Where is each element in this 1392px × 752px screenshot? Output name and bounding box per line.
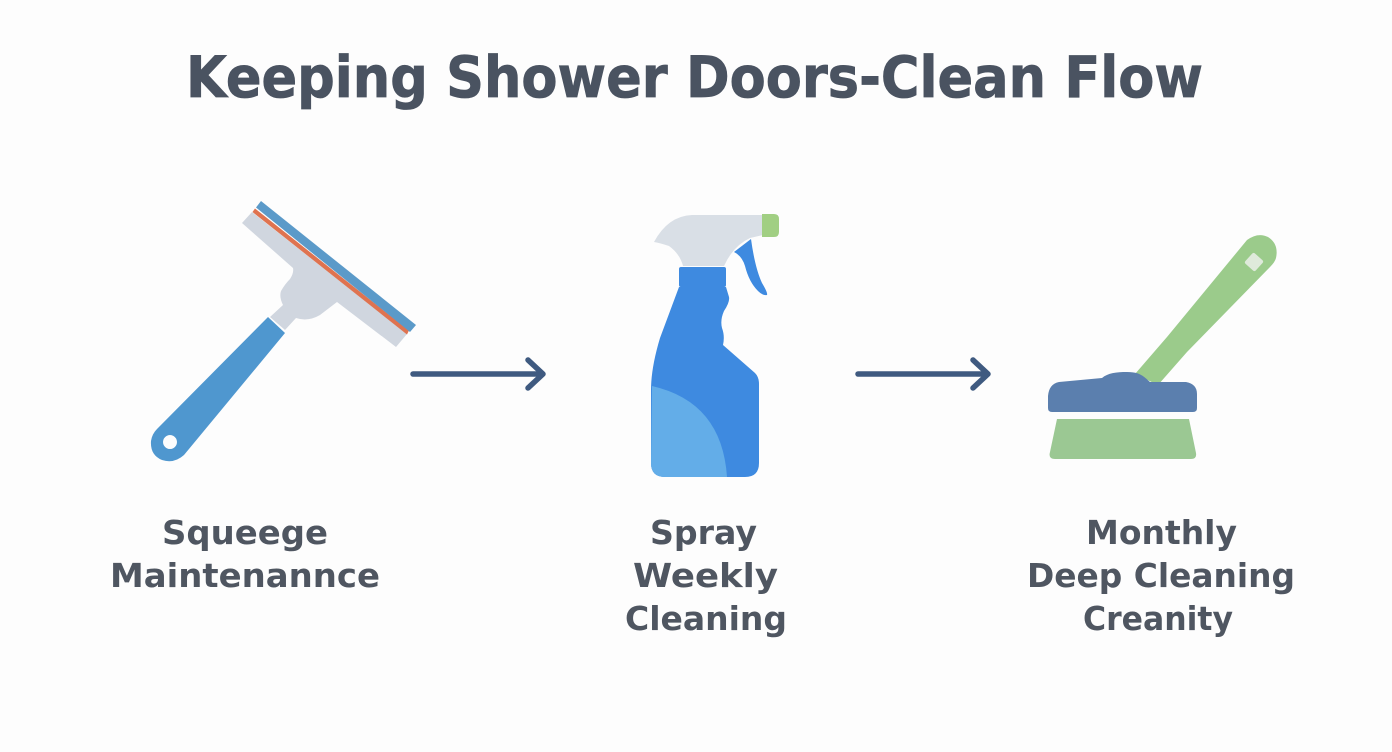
brush head [1048,372,1197,412]
bottle body [651,287,759,477]
squeegee handle [151,317,285,461]
label: squeegee maintenance [110,513,380,595]
bottle collar [679,267,726,287]
title: Keeping Shower Doors-Clean Flow [186,45,1203,111]
label: monthly deep cleaning [1027,513,1295,638]
handle grip mark [1244,252,1264,272]
sprayer head [654,215,763,266]
bottle highlight [651,386,727,477]
icon: scrub brush [1048,235,1277,459]
icon: spray bottle [651,214,779,477]
label: squeegee maintenance: Maintenannce [110,556,380,595]
icon: squeegee [151,201,416,461]
green nozzle [762,214,779,237]
label: spray weekly cleaning: Spray [650,513,757,552]
label: spray weekly cleaning: Weekly [633,556,778,595]
squeegee orange stripe [252,208,409,334]
label: spray weekly cleaning: Cleaning [625,599,787,638]
squeegee body [242,212,407,347]
label: monthly deep cleaning: Creanity [1083,599,1233,638]
arrow: squeegee to spray [413,360,543,388]
squeegee white gap [254,206,411,334]
bristles [1050,419,1196,459]
squeegee blue blade [256,201,416,332]
label: spray weekly cleaning [625,513,787,638]
arrow: spray to deep clean [858,360,988,388]
brush handle [1135,235,1277,385]
label: monthly deep cleaning: Monthly [1086,513,1237,552]
label: squeegee maintenance: Squeege [162,513,328,552]
label: monthly deep cleaning: Deep Cleaning [1027,556,1295,595]
trigger [734,239,767,295]
